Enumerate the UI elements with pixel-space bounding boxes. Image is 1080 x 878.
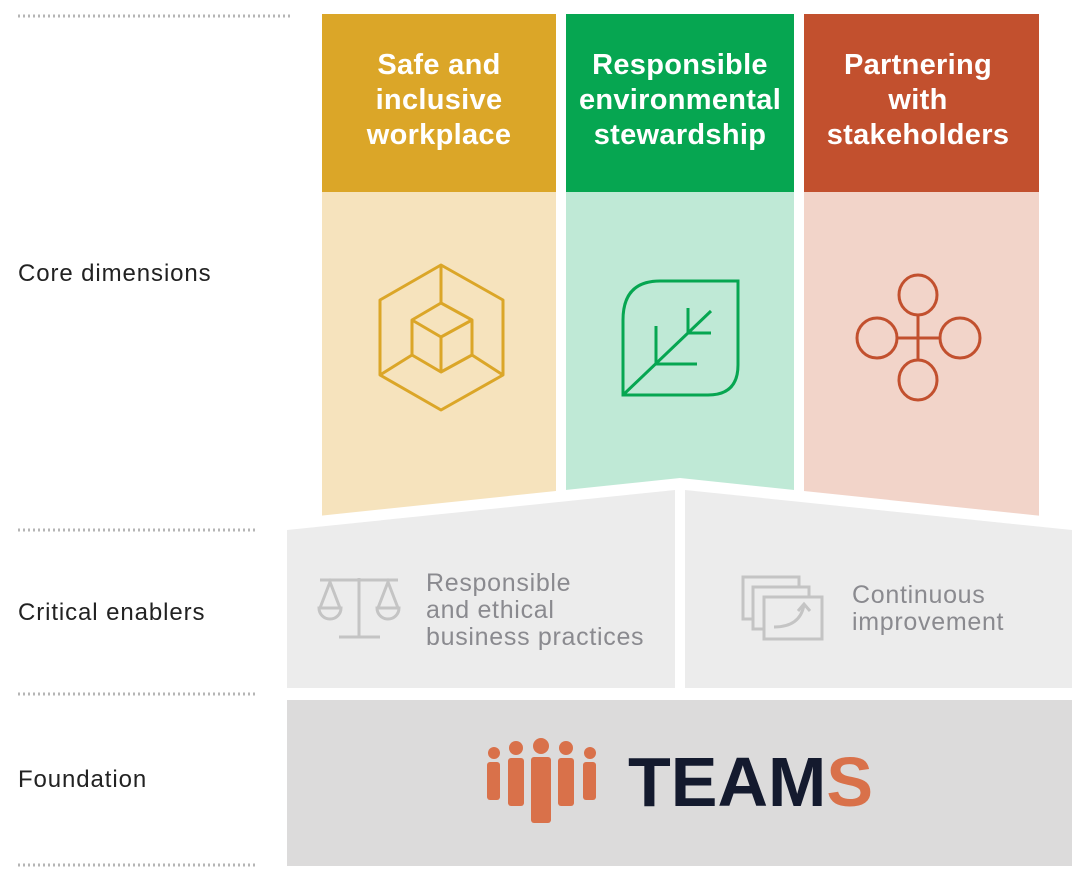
panel: continuous improvement: Continuous: [852, 581, 985, 609]
roof white separator: [280, 478, 1080, 700]
column: partnering with stakeholders: Partnering: [844, 49, 992, 81]
column: safe and inclusive workplace: Safe and: [377, 49, 501, 81]
panel: responsible and ethical business practices: Responsible: [426, 569, 571, 597]
panel: responsible and ethical business practices: [287, 490, 675, 688]
icon: network nodes: [857, 275, 980, 400]
label: critical enablers: Critical enablers: [18, 599, 205, 626]
label: foundation: Foundation: [18, 766, 147, 793]
label: core dimensions: Core dimensions: [18, 260, 212, 287]
column: partnering with stakeholders: with: [887, 84, 948, 116]
icon: leaf: [623, 281, 738, 395]
icon: group of people: [487, 738, 596, 823]
panel: continuous improvement: improvement: [852, 608, 1004, 636]
column: safe and inclusive workplace: inclusive: [376, 84, 502, 116]
column: responsible environmental stewardship: [566, 14, 794, 522]
icon: scales: [319, 578, 399, 637]
column: partnering with stakeholders: [804, 14, 1039, 522]
column: responsible environmental stewardship: stewardship: [594, 119, 766, 151]
column: responsible environmental stewardship: Responsible: [592, 49, 768, 81]
column: responsible environmental stewardship: environmental: [579, 84, 781, 116]
panel: responsible and ethical business practices: business practices: [426, 623, 644, 651]
panel: foundation TEAMS: TEAMS: [628, 743, 873, 821]
column: safe and inclusive workplace: [322, 14, 556, 522]
icon: stacked pages with arrow: [743, 577, 822, 639]
column: safe and inclusive workplace: workplace: [366, 119, 511, 151]
icon: cube in hexagon: [380, 265, 503, 410]
panel: continuous improvement: [685, 490, 1072, 688]
column: partnering with stakeholders: stakeholders: [827, 119, 1009, 151]
panel: responsible and ethical business practices: and ethical: [426, 596, 555, 624]
panel: foundation TEAMS: [287, 700, 1072, 866]
